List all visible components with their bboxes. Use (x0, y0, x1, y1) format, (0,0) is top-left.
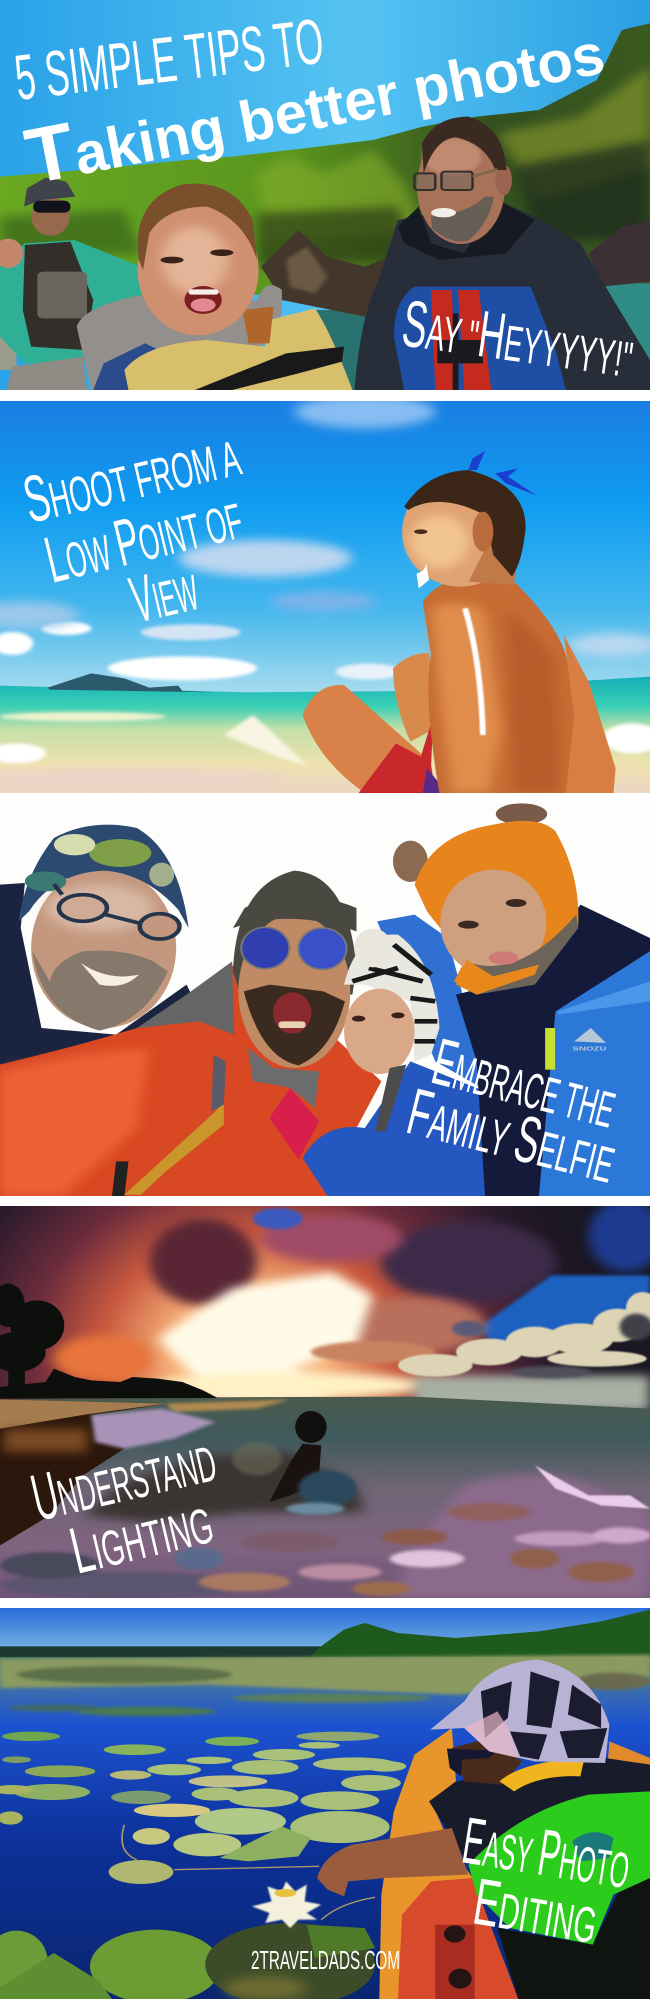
caption: shoot from a low point of view: LOW POINT OF (38, 478, 249, 597)
red mitten (269, 1088, 319, 1160)
caption: shoot from a low point of view (17, 415, 249, 637)
boy in life jacket (77, 184, 352, 390)
sky (0, 0, 650, 390)
panel: say hey (0, 0, 650, 391)
blue puffy jacket (303, 915, 497, 1196)
title line: taking better photos: Taking better photos (18, 2, 610, 201)
sea (0, 1397, 650, 1598)
rocks (261, 220, 650, 317)
small boy with striped hat (344, 929, 439, 1131)
caption: understand lighting (25, 1421, 222, 1588)
panel: family selfie (0, 803, 650, 1197)
panel: understand lighting (0, 1199, 650, 1599)
sky (0, 1608, 650, 1660)
water lily flower (252, 1881, 321, 1928)
waves (0, 712, 650, 788)
sky (0, 401, 650, 694)
caption: shoot from a low point of view: VIEW (124, 550, 205, 637)
kayak (379, 1728, 650, 1999)
panel: low point of view (0, 395, 650, 793)
clouds (54, 1199, 650, 1412)
jacket logo: SNOZU (572, 1047, 606, 1052)
jacket logo (572, 1028, 606, 1052)
boy seen from behind (303, 451, 616, 793)
distant lily band (0, 1655, 650, 1716)
middle man head (233, 871, 357, 1068)
caption: shoot from a low point of view: SHOOT FROM A (17, 415, 247, 537)
child in panda hat (317, 1660, 650, 1999)
foam (0, 1409, 650, 1599)
boy silhouette (232, 1411, 357, 1515)
sunset sky (0, 1206, 650, 1419)
tree silhouettes (0, 1284, 218, 1399)
website credit: 2TRAVELDADS.COM (251, 1945, 400, 1975)
far tree lines (0, 1610, 650, 1658)
forest (0, 23, 650, 300)
water (0, 1657, 650, 1999)
middle man red jacket (0, 961, 381, 1196)
right boy with bear hood (393, 803, 650, 1196)
woman in background (0, 178, 145, 390)
panel: easy photo editing (0, 1608, 650, 2000)
sand and wet sand (0, 1399, 290, 1545)
left man (0, 825, 195, 1065)
stems (122, 1825, 375, 1920)
man on right (354, 117, 650, 390)
sea and sand (0, 677, 650, 793)
caption: easy photo editing (458, 1803, 635, 1957)
caption: understand lighting: UNDERSTAND (25, 1421, 222, 1535)
island (48, 673, 216, 692)
caption: understand lighting: LIGHTING (63, 1482, 219, 1588)
lily pads (0, 1732, 406, 1884)
darker near water (83, 1452, 365, 1522)
white sky (0, 803, 650, 1196)
big foreground pads (0, 1923, 375, 2000)
water (0, 283, 650, 390)
clouds (0, 395, 650, 680)
